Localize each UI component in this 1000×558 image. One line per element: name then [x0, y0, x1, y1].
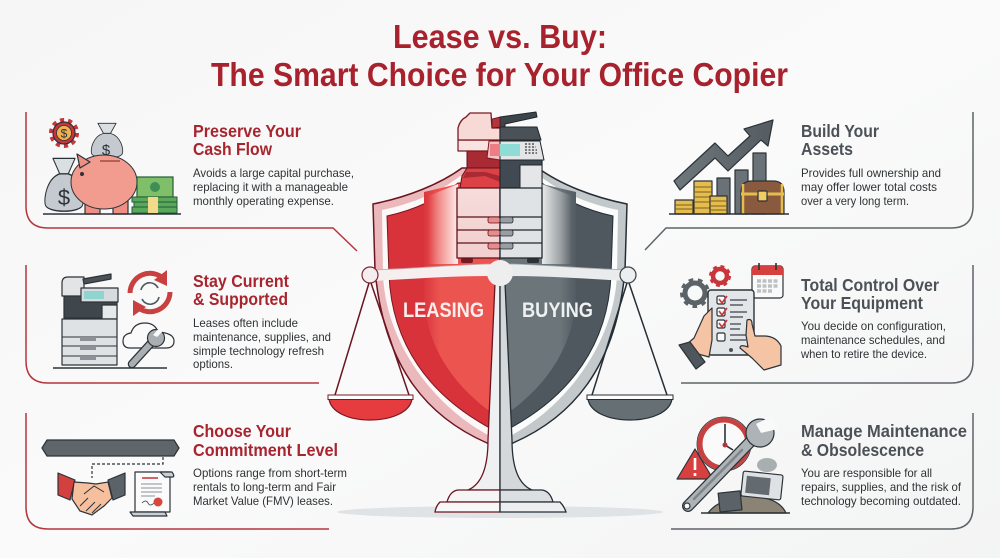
- heading: Preserve Your: [193, 121, 301, 141]
- panel border: [26, 112, 357, 251]
- panel border: [26, 265, 319, 383]
- stand shadow: [337, 506, 663, 518]
- central graphic: shield, scale and copier: [328, 112, 673, 518]
- heading: Your Equipment: [801, 293, 923, 313]
- body text: Provides full ownership and: [801, 166, 941, 180]
- heading: Cash Flow: [193, 139, 272, 159]
- icon: term bar, handshake and contract: [42, 440, 179, 516]
- heading: [801, 121, 879, 159]
- copier: [457, 112, 544, 263]
- panel: preserve your cash flow: [26, 112, 357, 251]
- heading: Manage Maintenance: [801, 421, 967, 441]
- body text: [800, 319, 946, 361]
- panel border: [645, 112, 973, 250]
- heading: [193, 271, 289, 309]
- heading: Total Control Over: [801, 275, 939, 295]
- heading: & Supported: [193, 289, 288, 309]
- panel: choose your commitment level: [26, 413, 347, 529]
- icon: piggy bank and money: $: [61, 126, 68, 140]
- body text: simple technology refresh: [193, 344, 324, 358]
- title: The Smart Choice for Your Office Copier: [211, 56, 788, 93]
- body text: rentals to long-term and Fair: [193, 480, 336, 494]
- body text: repairs, supplies, and the risk of: [801, 480, 962, 494]
- body text: over a very long term.: [801, 194, 909, 208]
- body text: Market Value (FMV) leases.: [193, 494, 333, 508]
- body text: [801, 166, 941, 208]
- body text: may offer lower total costs: [801, 180, 937, 194]
- icon: clock, warning, wrench and old equipment: [677, 416, 790, 513]
- icon: checklist tablet, gears and calendar: [679, 263, 783, 370]
- body text: [193, 166, 354, 208]
- heading: Build Your: [801, 121, 879, 141]
- body text: [193, 316, 331, 371]
- body text: Leases often include: [193, 316, 298, 330]
- shield: buying half: [500, 168, 627, 446]
- panel: manage maintenance and obsolescence: [671, 413, 973, 529]
- panel border: [681, 265, 973, 383]
- shield: leasing half: [373, 168, 500, 446]
- icon: piggy bank and money: [43, 121, 181, 214]
- body text: options.: [193, 357, 233, 371]
- body text: Options range from short-term: [193, 466, 347, 480]
- body text: replacing it with a manageable: [193, 180, 348, 194]
- body text: technology becoming outdated.: [801, 494, 961, 508]
- body text: [801, 466, 962, 508]
- panel: build your assets: [645, 112, 973, 250]
- left scale pan: [328, 283, 413, 420]
- body text: monthly operating expense.: [193, 194, 334, 208]
- panel: stay current and supported: [26, 265, 331, 383]
- label: leasing: LEASING: [403, 299, 484, 322]
- body text: [193, 466, 347, 508]
- icon: piggy bank and money: $: [102, 142, 111, 159]
- panel border: [26, 413, 329, 529]
- body text: when to retire the device.: [800, 347, 927, 361]
- right scale pan: [587, 283, 673, 420]
- heading: Choose Your: [193, 421, 291, 441]
- panel: total control over your equipment: [679, 263, 973, 383]
- icon: copier, refresh arrows, cloud and wrench: [53, 270, 174, 368]
- heading: [193, 421, 338, 460]
- scale beam: [362, 260, 636, 286]
- panel border: [671, 413, 973, 529]
- title: [211, 18, 788, 93]
- body text: You decide on configuration,: [801, 319, 946, 333]
- body text: Avoids a large capital purchase,: [193, 166, 354, 180]
- heading: Assets: [801, 139, 853, 159]
- heading: [801, 275, 939, 313]
- body text: maintenance schedules, and: [801, 333, 945, 347]
- icon: rising arrow, coins and chest: [669, 120, 789, 214]
- title: Lease vs. Buy:: [393, 18, 607, 55]
- heading: Commitment Level: [193, 440, 338, 460]
- label: buying: BUYING: [522, 299, 593, 322]
- icon: piggy bank and money: $: [58, 185, 70, 210]
- heading: [193, 121, 301, 159]
- heading: & Obsolescence: [801, 440, 924, 460]
- heading: Stay Current: [193, 271, 289, 291]
- heading: [801, 421, 967, 460]
- scale pole and base: [435, 283, 566, 512]
- body text: maintenance, supplies, and: [193, 330, 331, 344]
- body text: You are responsible for all: [801, 466, 932, 480]
